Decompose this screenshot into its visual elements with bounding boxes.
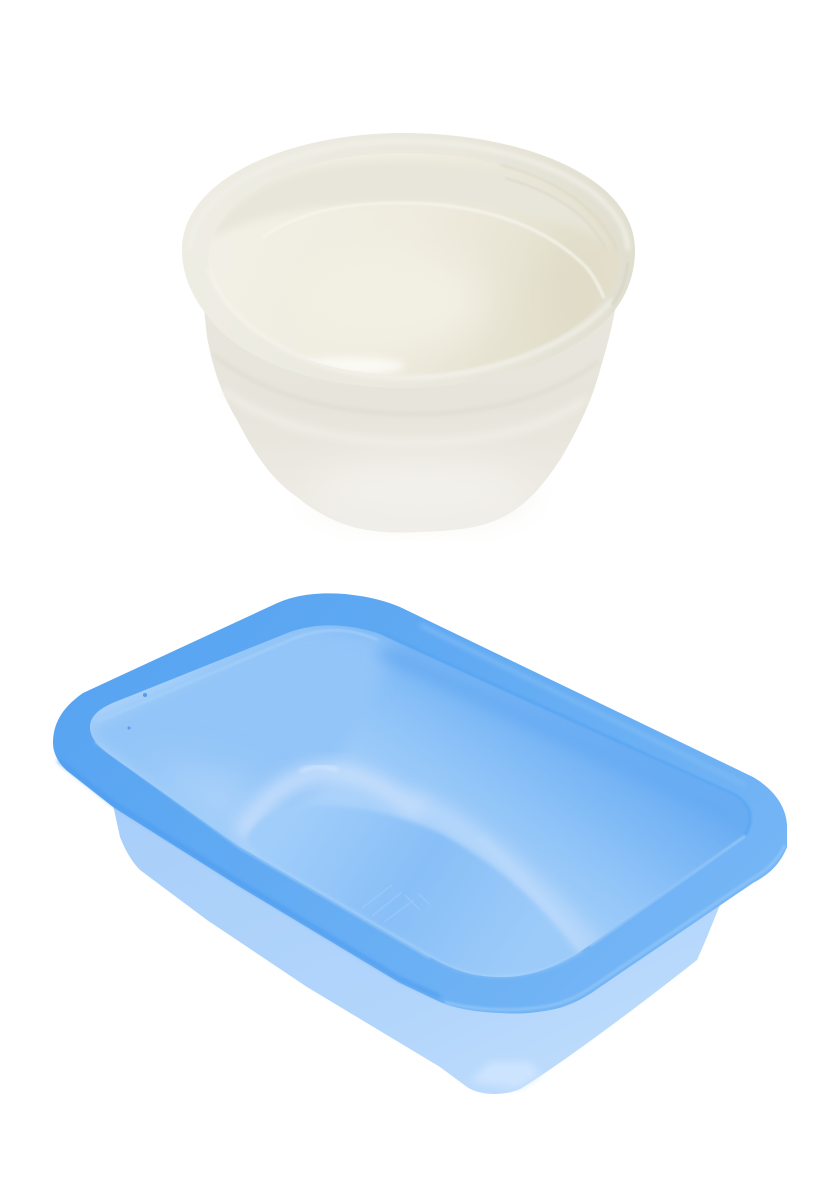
tray lower-left inner rim line bbox=[95, 742, 430, 958]
bowl interior centre glow bbox=[410, 276, 476, 336]
tray inner rim highlight bbox=[97, 630, 378, 722]
bowl lower body highlight bbox=[310, 462, 530, 518]
bowl interior upper wall bbox=[217, 166, 590, 232]
bowl interior right shadow bbox=[541, 235, 609, 345]
tray right inner rim darker line bbox=[380, 632, 750, 835]
tray foot highlight bbox=[470, 1062, 540, 1088]
bowl floor highlight bbox=[316, 356, 404, 374]
tray floor bbox=[247, 805, 580, 976]
bowl rim bbox=[182, 133, 635, 388]
tray inner floor highlight ridge bbox=[300, 766, 338, 772]
bowl interior shading bbox=[217, 166, 587, 374]
tray left wall bbox=[80, 625, 400, 850]
tray corner ridge glow bbox=[240, 772, 420, 838]
bowl upper right ridges bbox=[500, 165, 617, 250]
tray rim bbox=[53, 593, 787, 1014]
bowl inner step line bbox=[262, 203, 604, 298]
tray upper wall darker band bbox=[375, 642, 587, 750]
tray right inner rim light line bbox=[590, 836, 745, 946]
tray rim left lower darker band bbox=[58, 760, 440, 997]
tray small specks bbox=[128, 693, 147, 730]
tray interior shading bbox=[90, 627, 595, 950]
tray rim bottom lighter edge bbox=[445, 845, 785, 1010]
tray embossed mark bbox=[362, 885, 430, 922]
bowl body ridges bbox=[214, 355, 598, 442]
tray outer body bbox=[113, 805, 722, 1094]
tray: blue rectangular container bbox=[53, 593, 787, 1094]
tray right wall glow bbox=[410, 800, 590, 950]
illustration: two food containers bbox=[53, 133, 788, 1094]
tray interior bbox=[90, 625, 750, 977]
tray lower-left wall light bbox=[164, 763, 252, 834]
bowl outer body bbox=[203, 300, 617, 532]
bowl rim top light band bbox=[190, 141, 628, 250]
bowl: off-white round container bbox=[182, 133, 635, 532]
tray rim outer lighter stripe bbox=[420, 625, 745, 785]
tray right floor ridge bbox=[480, 838, 580, 950]
bowl rim right shade bbox=[612, 262, 628, 305]
bowl front lip bbox=[208, 268, 612, 378]
bowl interior bbox=[208, 153, 620, 375]
